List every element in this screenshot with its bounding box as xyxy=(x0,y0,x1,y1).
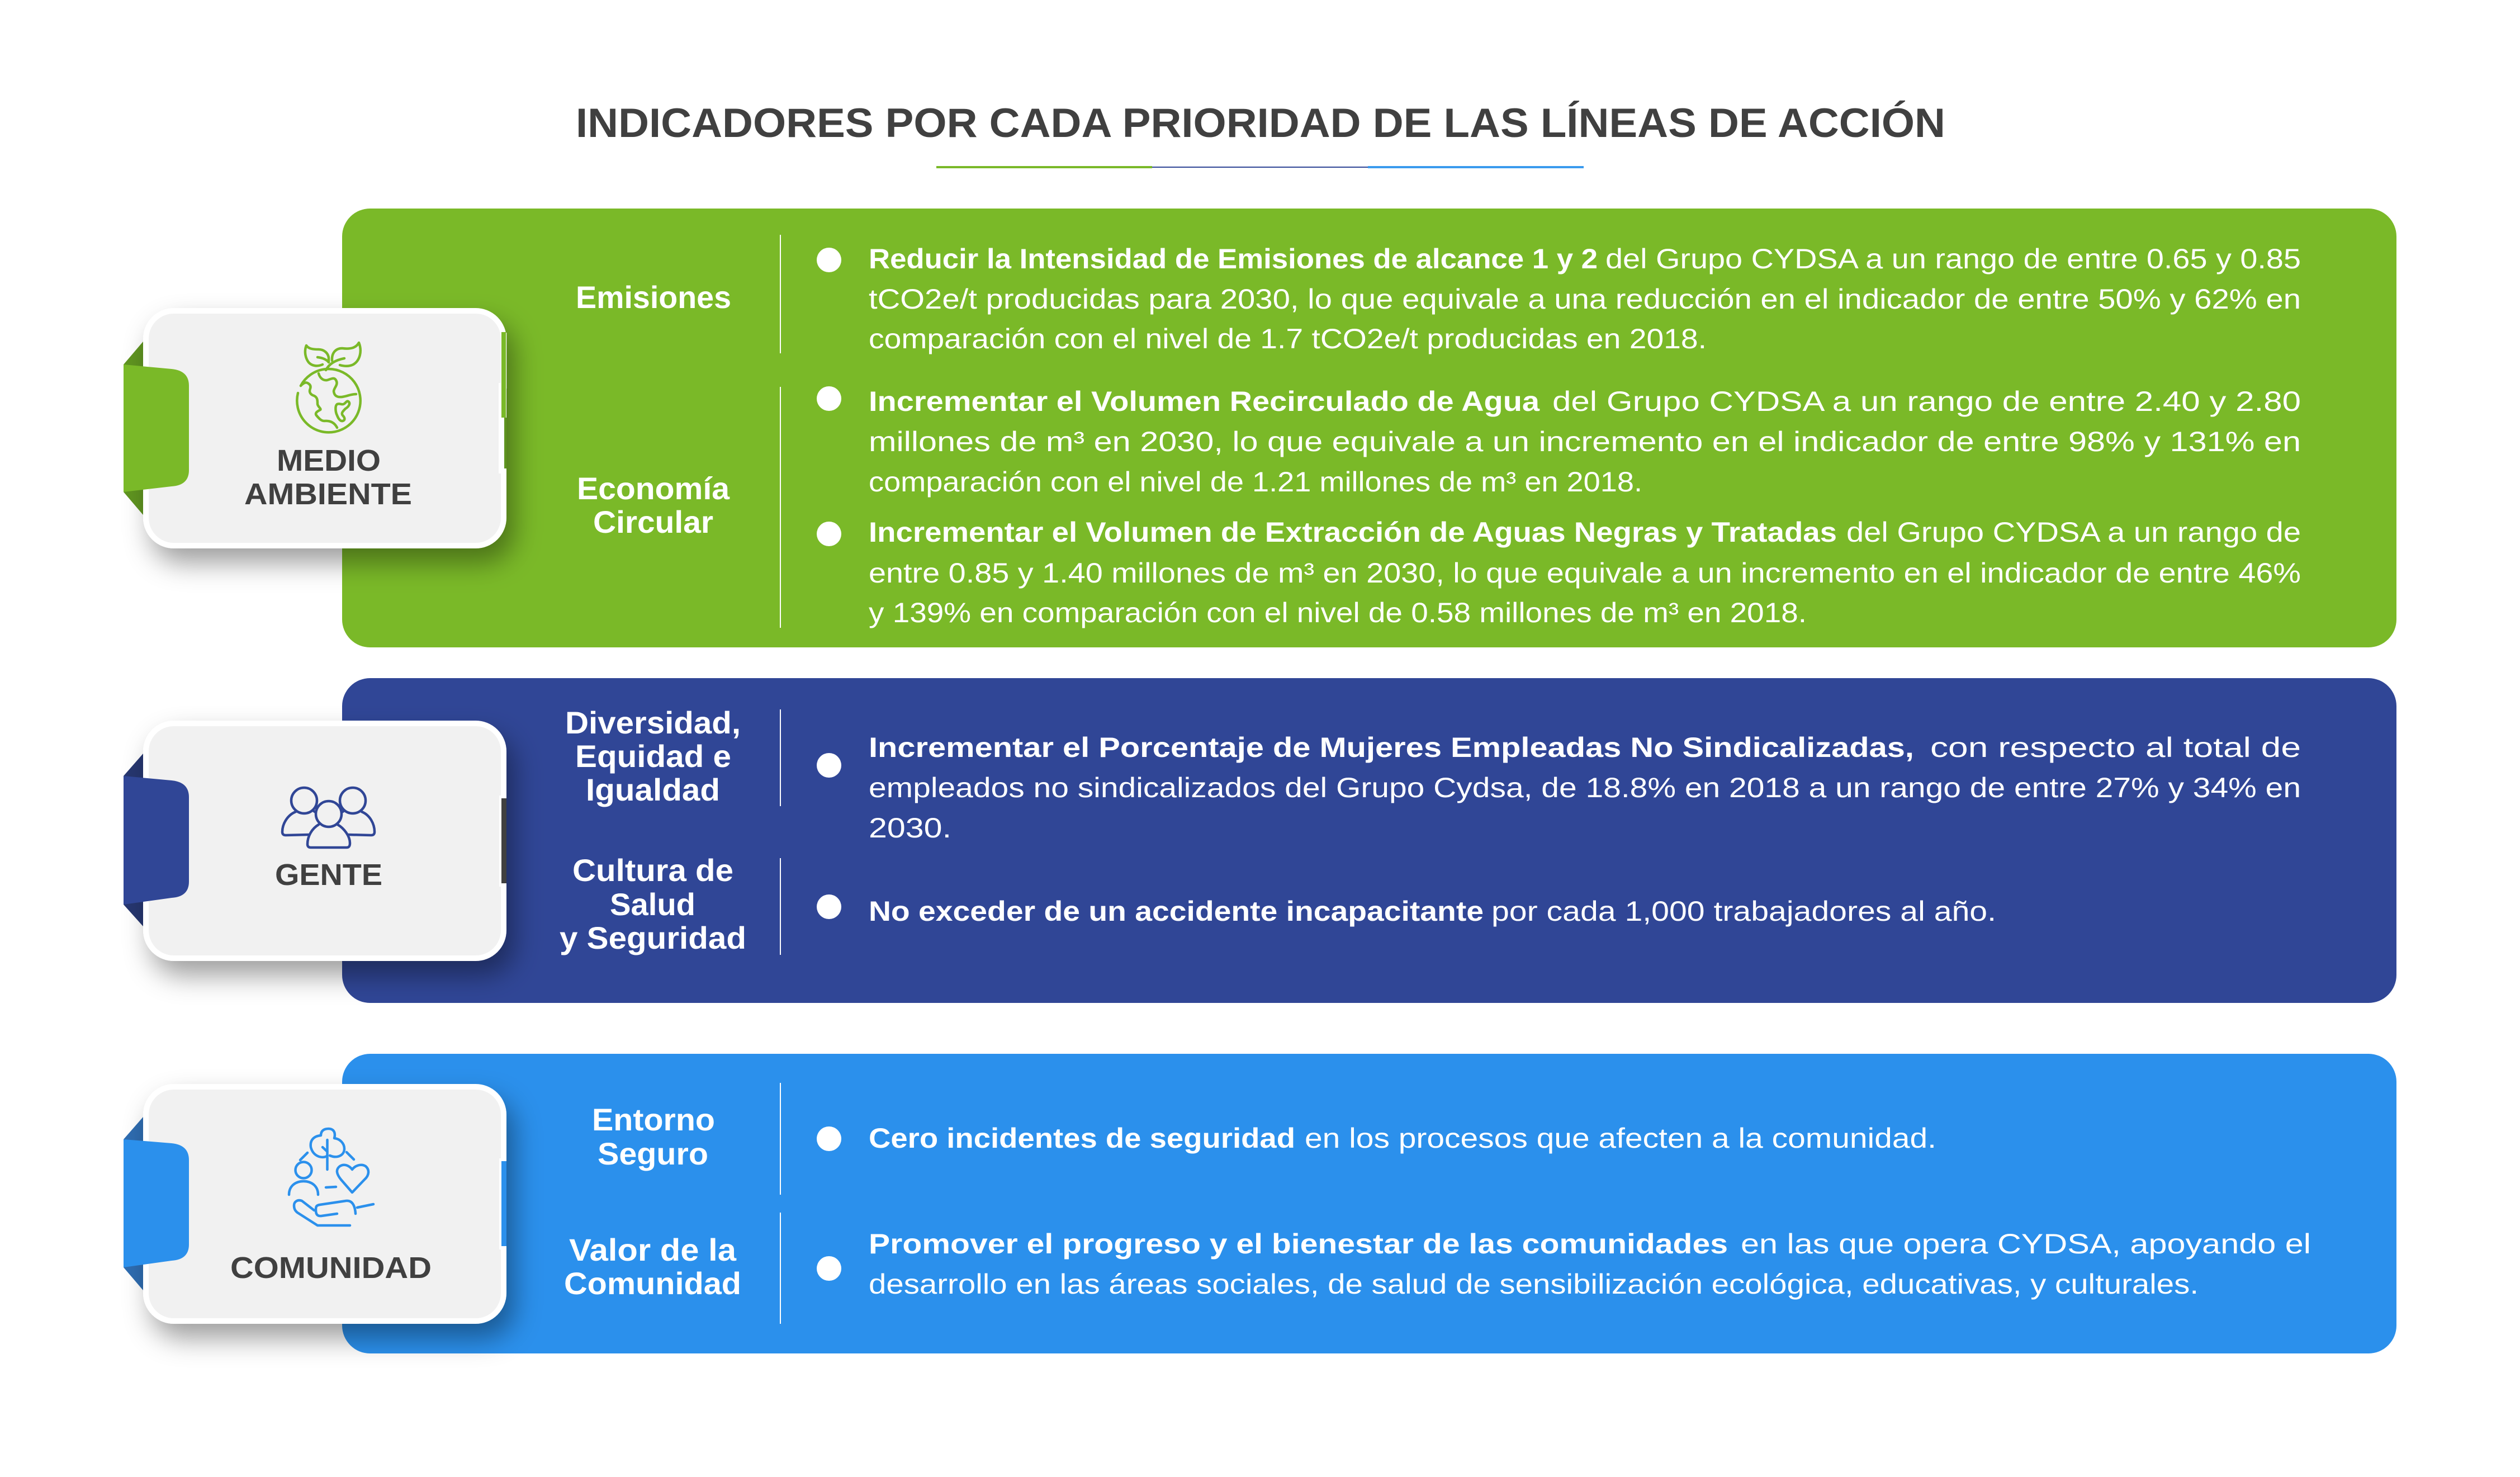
text: accidentes xyxy=(869,896,1996,927)
text: seguridad xyxy=(869,1123,1936,1154)
icon: earth with leaves xyxy=(297,343,361,432)
text: accidentes: por cada 1,000 trabajadores al año. xyxy=(1491,896,1996,927)
text: accidentes: No exceder de un accidente incapacitante xyxy=(869,896,1484,927)
heading: Valor de la Comunidad xyxy=(564,1232,741,1301)
card: medio ambiente xyxy=(124,311,506,546)
text: aguas negras: y 139% en comparación con el nivel de 0.58 millones de m³ en 2018. xyxy=(869,597,1807,628)
bullet: seguridad xyxy=(817,1126,841,1151)
text: emisiones: Reducir la Intensidad de Emisiones de alcance 1 y 2 xyxy=(869,243,1598,274)
ribbon xyxy=(124,1139,189,1267)
text: mujeres xyxy=(869,732,2301,844)
label: medio ambiente xyxy=(244,444,412,511)
heading: Diversidad, Equidad e Igualdad: Diversidad, xyxy=(565,705,741,740)
text: mujeres: empleados no sindicalizados del Grupo Cydsa, de 18.8% en 2018 a un rango de entre 27% y 34% en xyxy=(869,772,2301,803)
label: comunidad: COMUNIDAD xyxy=(230,1251,432,1285)
text: agua recirculada: millones de m³ en 2030, lo que equivale a un incremento en el indicador de entre 98% y 131% en xyxy=(869,426,2301,457)
panel: gente xyxy=(342,678,2396,1003)
text: comunidades xyxy=(869,1228,2311,1300)
heading: Economía Circular: Circular xyxy=(593,504,713,539)
text: emisiones xyxy=(869,243,2301,354)
text: aguas negras xyxy=(869,517,2301,628)
text: mujeres: con respecto al total de xyxy=(1930,732,2301,763)
label: medio ambiente: AMBIENTE xyxy=(244,477,412,511)
title: INDICADORES POR CADA PRIORIDAD DE LAS LÍNEAS DE ACCIÓN xyxy=(576,101,1945,146)
heading: Diversidad, Equidad e Igualdad xyxy=(565,705,741,807)
ribbon xyxy=(124,364,189,492)
heading: Cultura de Salud y Seguridad: Cultura de xyxy=(572,853,733,888)
card: comunidad xyxy=(124,1087,506,1321)
text: agua recirculada: comparación con el nivel de 1.21 millones de m³ en 2018. xyxy=(869,466,1642,498)
text: aguas negras: del Grupo CYDSA a un rango de xyxy=(1846,517,2301,548)
text: mujeres: Incrementar el Porcentaje de Mujeres Empleadas No Sindicalizadas, xyxy=(869,732,1914,763)
heading: Economía Circular: Economía xyxy=(577,471,730,506)
heading: Valor de la Comunidad: Valor de la xyxy=(569,1232,737,1267)
panel: medio ambiente xyxy=(342,209,2396,647)
bullet: emisiones xyxy=(817,248,841,272)
text: seguridad: Cero incidentes de seguridad xyxy=(869,1123,1295,1154)
card: gente xyxy=(124,723,506,958)
heading: Entorno Seguro: Entorno xyxy=(592,1102,715,1137)
heading: Cultura de Salud y Seguridad xyxy=(560,853,746,955)
text: emisiones: del Grupo CYDSA a un rango de entre 0.65 y 0.85 xyxy=(1605,243,2301,274)
text: comunidades: Promover el progreso y el bienestar de las comunidades xyxy=(869,1228,1728,1260)
panel: comunidad xyxy=(342,1054,2396,1353)
text: emisiones: tCO2e/t producidas para 2030, lo que equivale a una reducción en el indicador de entre 50% y 62% en xyxy=(869,283,2301,315)
text: agua recirculada: del Grupo CYDSA a un rango de entre 2.40 y 2.80 xyxy=(1552,386,2301,417)
bullet: comunidades xyxy=(817,1256,841,1281)
bullet: accidentes xyxy=(817,894,841,919)
heading: Entorno Seguro xyxy=(592,1102,715,1171)
text: aguas negras: entre 0.85 y 1.40 millones de m³ en 2030, lo que equivale a un incremento en el indicador de entre 46% xyxy=(869,557,2301,589)
text: comunidades: desarrollo en las áreas sociales, de salud de sensibilización ecológica, educativas, y culturales. xyxy=(869,1268,2199,1300)
heading: Valor de la Comunidad: Comunidad xyxy=(564,1266,741,1301)
heading: Cultura de Salud y Seguridad: y Seguridad xyxy=(560,920,746,955)
text: comunidades: en las que opera CYDSA, apoyando el xyxy=(1741,1228,2311,1260)
bullet: agua recirculada xyxy=(817,386,841,411)
heading: Entorno Seguro: Seguro xyxy=(598,1136,708,1171)
icon: hand with tree, person and heart xyxy=(289,1129,373,1225)
heading: Cultura de Salud y Seguridad: Salud xyxy=(610,887,695,922)
heading: Economía Circular xyxy=(577,471,730,539)
text: seguridad: en los procesos que afecten a la comunidad. xyxy=(1305,1123,1936,1154)
icon: three people xyxy=(282,788,375,848)
text: agua recirculada xyxy=(869,386,2301,498)
text: mujeres: 2030. xyxy=(869,812,951,844)
bullet: mujeres xyxy=(817,753,841,778)
label: gente: GENTE xyxy=(275,858,382,892)
heading: Diversidad, Equidad e Igualdad: Igualdad xyxy=(586,772,720,807)
heading: Diversidad, Equidad e Igualdad: Equidad e xyxy=(575,738,731,774)
label: medio ambiente: MEDIO xyxy=(277,444,381,477)
text: agua recirculada: Incrementar el Volumen Recirculado de Agua xyxy=(869,386,1540,417)
bullet: aguas negras xyxy=(817,522,841,546)
text: aguas negras: Incrementar el Volumen de Extracción de Aguas Negras y Tratadas xyxy=(869,517,1837,548)
text: emisiones: comparación con el nivel de 1.7 tCO2e/t producidas en 2018. xyxy=(869,323,1707,354)
ribbon xyxy=(124,776,189,905)
title underline xyxy=(936,166,1584,168)
heading: Emisiones: Emisiones xyxy=(576,280,731,315)
